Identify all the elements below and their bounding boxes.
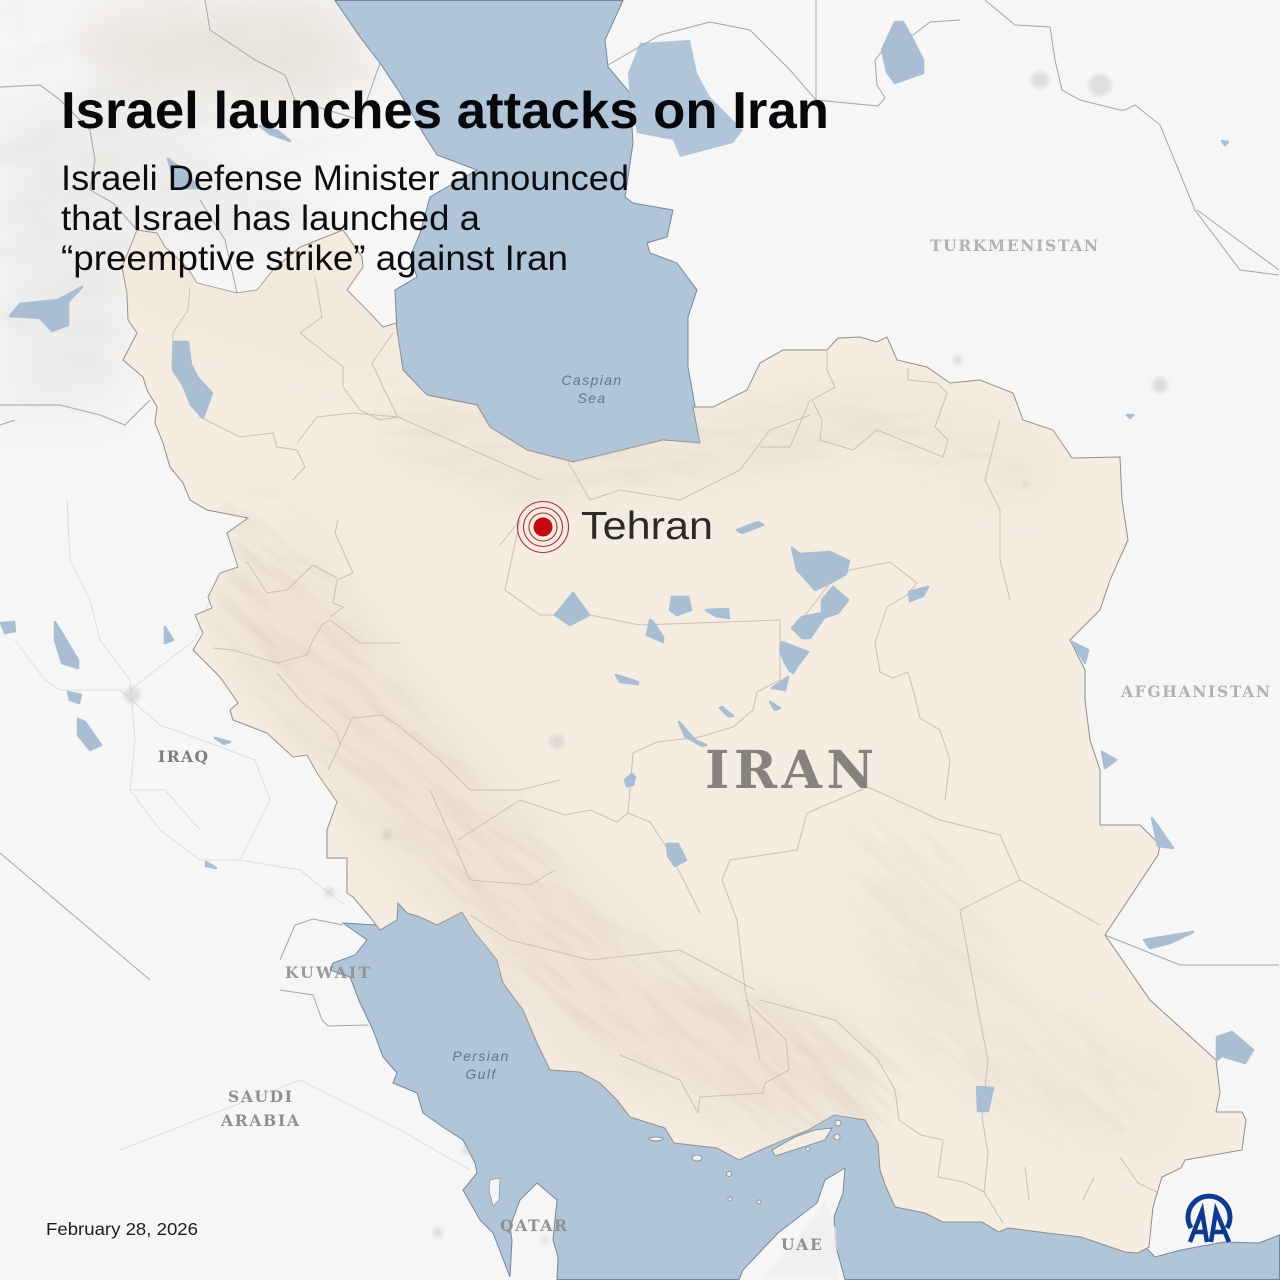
label: Caspian Sea [561, 372, 623, 406]
subtitle [61, 159, 629, 278]
subtitle: “preemptive strike” against Iran [61, 239, 568, 278]
Bahrain island [489, 1178, 500, 1206]
terrain: caucasus and turkey highlands [0, 0, 390, 430]
label: Iran: IRAN [705, 740, 874, 801]
label: Saudi Arabia [220, 1087, 300, 1130]
label: Qatar: QATAR [500, 1216, 567, 1235]
province borders [172, 277, 1157, 1223]
label: Caspian Sea: Caspian [561, 372, 623, 388]
label: Saudi Arabia: SAUDI [228, 1087, 292, 1106]
rivers and roads [15, 500, 470, 1170]
label: Afghanistan: AFGHANISTAN [1120, 682, 1270, 701]
label: Tehran: Tehran [581, 505, 713, 548]
label: UAE: UAE [781, 1235, 822, 1254]
label: Persian Gulf [452, 1048, 510, 1082]
small gulf islands [649, 1120, 841, 1204]
label: Persian Gulf: Gulf [465, 1066, 497, 1082]
sea: Caspian [335, 0, 743, 462]
title: Israel launches attacks on Iran [61, 82, 829, 140]
Qeshm island [772, 1128, 832, 1156]
land mass: UAE shading [760, 1200, 838, 1279]
country: Iran [62, 230, 1270, 1265]
terrain shading [122, 230, 1154, 1149]
label: Persian Gulf: Persian [452, 1048, 510, 1064]
sea: Persian Gulf and Gulf of Oman [330, 880, 1280, 1280]
subtitle: Israeli Defense Minister announced [61, 159, 629, 198]
marker: Tehran [518, 502, 568, 552]
label: Turkmenistan: TURKMENISTAN [930, 236, 1098, 255]
label: Iraq: IRAQ [158, 747, 208, 766]
label: Saudi Arabia: ARABIA [220, 1111, 300, 1130]
subtitle: that Israel has launched a [61, 199, 481, 238]
date: February 28, 2026 [46, 1219, 198, 1239]
city footprints [124, 71, 1168, 1244]
icon: agency logo [1188, 1196, 1230, 1242]
label: Kuwait: KUWAIT [285, 963, 370, 982]
label: Caspian Sea: Sea [577, 390, 607, 406]
Kara-Bogaz Gol [628, 40, 743, 157]
